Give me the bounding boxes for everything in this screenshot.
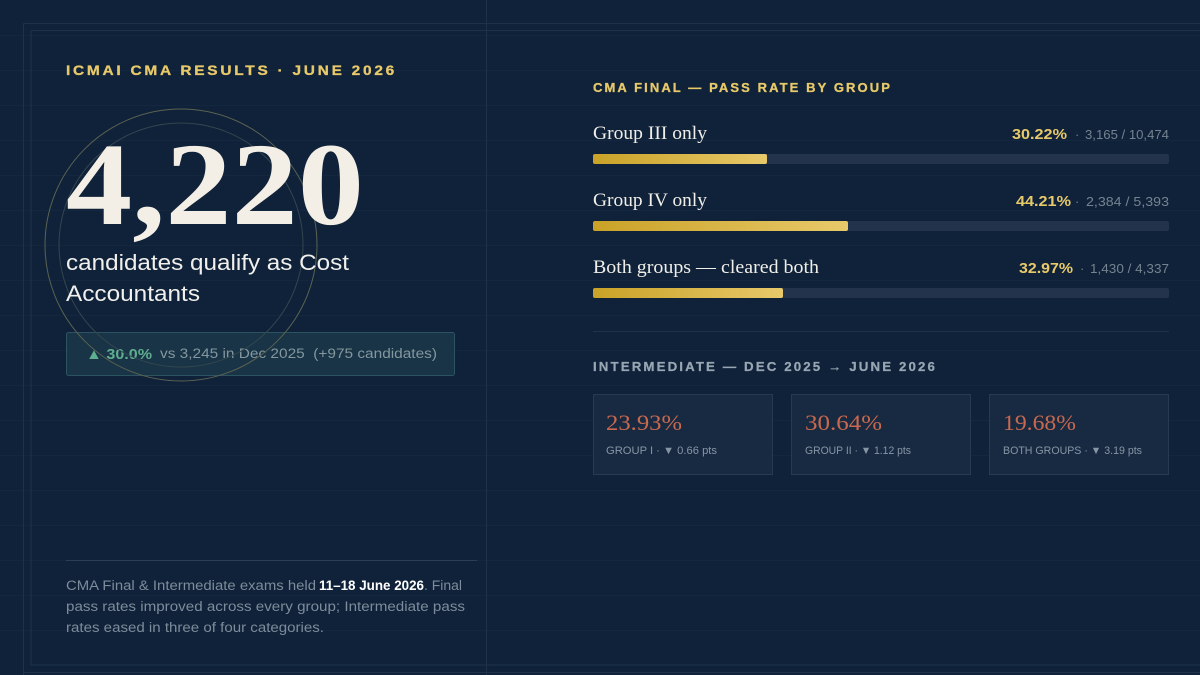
card: Group I — [594, 394, 772, 474]
card: Group I: GROUP I · ▼ 0.66 pts — [606, 445, 718, 457]
footer divider and note: pass rates improved across every group; Intermediate pass — [66, 599, 465, 614]
subheading: Accountants — [66, 281, 200, 306]
row: Group III: Group III only — [593, 123, 708, 144]
panel: CMA final pass rates — [593, 81, 1169, 298]
subheading: candidates qualify as Cost — [66, 250, 349, 275]
section heading: CMA FINAL — PASS RATE BY GROUP — [593, 81, 892, 95]
row: Both groups: 32.97% — [1019, 261, 1073, 277]
eyebrow heading: ICMAI CMA RESULTS · JUNE 2026 — [66, 63, 397, 78]
growth badge: vs 3,245 in Dec 2025 (+975 candidates) — [160, 346, 437, 361]
row: Group IV: Group IV only — [593, 190, 707, 211]
row: Both groups: · — [1080, 261, 1084, 276]
row: Both groups: Both groups — cleared both — [593, 257, 820, 278]
row: Both groups: 1,430 / 4,337 — [1090, 261, 1169, 276]
row: Group IV — [593, 190, 1169, 231]
card: Group II — [792, 394, 970, 474]
big number: 4,220 — [66, 119, 364, 250]
row: Group IV: · — [1075, 194, 1079, 209]
card: Group II: GROUP II · ▼ 1.12 pts — [805, 445, 911, 457]
footer divider and note — [66, 560, 477, 635]
card: Group II: 30.64% — [805, 410, 882, 435]
decorative rings — [45, 109, 317, 381]
footer divider and note: rates eased in three of four categories. — [66, 620, 324, 635]
row: Group III: 30.22% — [1012, 127, 1067, 143]
card: Both groups: BOTH GROUPS · ▼ 3.19 pts — [1003, 445, 1142, 457]
section heading: INTERMEDIATE — DEC 2025 → JUNE 2026 — [593, 360, 937, 374]
subheading — [66, 250, 349, 306]
card: Both groups: 19.68% — [1003, 410, 1076, 435]
card: Group I: 23.93% — [606, 410, 682, 435]
row: Group IV: 44.21% — [1016, 194, 1071, 210]
growth badge: ▲ 30.0% — [86, 346, 152, 363]
row: Group III — [593, 123, 1169, 164]
panel: headline — [45, 63, 477, 635]
footer divider and note: 11–18 June 2026 — [319, 578, 424, 593]
panel: intermediate results — [593, 360, 1168, 474]
row: Both groups — [593, 257, 1169, 298]
row: Group III: · — [1075, 127, 1079, 142]
card: Both groups — [990, 394, 1168, 474]
row: Group III: 3,165 / 10,474 — [1085, 127, 1169, 142]
footer divider and note: CMA Final & Intermediate exams held — [66, 578, 316, 593]
footer divider and note: . Final — [424, 578, 462, 593]
growth badge — [66, 332, 454, 376]
row: Group IV: 2,384 / 5,393 — [1086, 194, 1169, 209]
